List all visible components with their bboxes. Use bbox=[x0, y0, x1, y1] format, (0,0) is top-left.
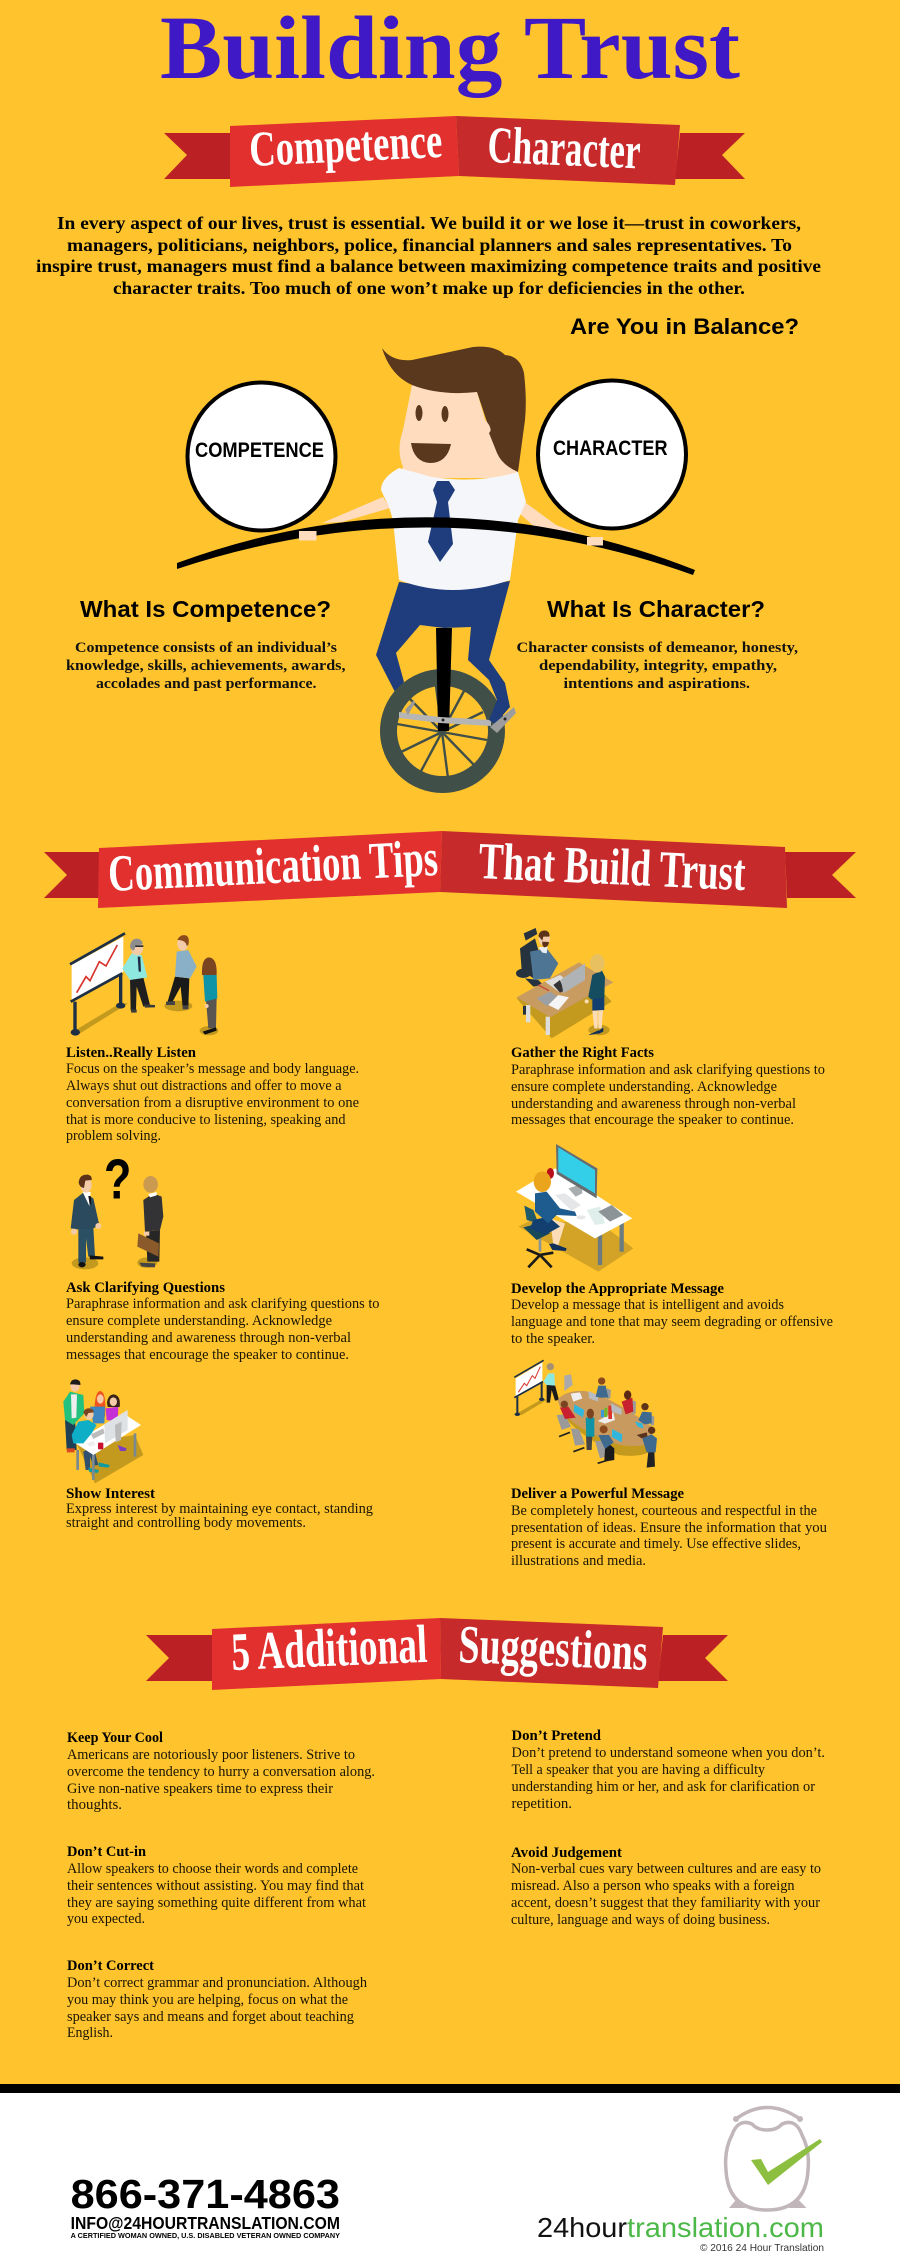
brand name: 24hourtranslation.com: 24hour bbox=[537, 2212, 627, 2243]
circle: character bbox=[538, 380, 686, 528]
circle: character: CHARACTER bbox=[553, 437, 668, 460]
intro paragraph: character traits. Too much of one won’t make up for deficiencies in the other. bbox=[113, 278, 745, 298]
heading: Are You in Balance?: Are You in Balance? bbox=[570, 314, 799, 339]
suggestion: don't pretend: Don’t Pretend bbox=[512, 1728, 601, 1744]
company tagline: A CERTIFIED WOMAN OWNED, U.S. DISABLED VETERAN OWNED COMPANY bbox=[71, 2231, 340, 2240]
tip: show interest: Show Interest bbox=[66, 1486, 155, 1502]
section: what is competence: accolades and past performance. bbox=[96, 676, 317, 692]
suggestion: avoid judgement: accent, doesn’t suggest that they familiarity with your bbox=[511, 1895, 820, 1911]
suggestion: don't correct: English. bbox=[67, 2025, 113, 2041]
tip: show interest: straight and controlling body movements. bbox=[66, 1515, 306, 1531]
tip: ask clarifying questions: ensure complete understanding. Acknowledge bbox=[66, 1313, 332, 1329]
tip: gather the right facts: ensure complete understanding. Acknowledge bbox=[511, 1079, 777, 1095]
section: what is competence: Competence consists of an individual’s bbox=[75, 640, 337, 656]
tip: listen really listen: conversation from a disruptive environment to one bbox=[66, 1095, 359, 1111]
suggestion: avoid judgement: Non-verbal cues vary between cultures and are easy to bbox=[511, 1861, 821, 1877]
suggestion: keep your cool: thoughts. bbox=[67, 1797, 122, 1813]
section: what is competence: knowledge, skills, achievements, awards, bbox=[66, 658, 346, 674]
suggestion: don't pretend: understanding him or her, and ask for clarification or bbox=[512, 1779, 815, 1795]
ribbon banner: Communication Tips That Build Trust bbox=[44, 830, 856, 908]
email address: INFO@24HOURTRANSLATION.COM bbox=[71, 2213, 340, 2233]
section: what is competence: What Is Competence? bbox=[80, 596, 331, 622]
brand name: 24hourtranslation.com: translation.com bbox=[627, 2212, 824, 2243]
section: what is character: intentions and aspirations. bbox=[564, 676, 750, 692]
suggestion: don't correct: you may think you are helping, focus on what the bbox=[67, 1992, 348, 2008]
intro paragraph bbox=[36, 213, 821, 298]
tip: deliver a powerful message: present is accurate and timely. Use effective slides, bbox=[511, 1536, 801, 1552]
tip: develop the appropriate message: Develop the Appropriate Message bbox=[511, 1281, 725, 1297]
circle: competence bbox=[188, 382, 336, 530]
icon: alarm clock logo with check mark bbox=[726, 2108, 822, 2210]
suggestion: don't pretend bbox=[512, 1728, 825, 1812]
circle: competence: COMPETENCE bbox=[195, 439, 324, 462]
tip: gather the right facts: understanding and awareness through non-verbal bbox=[511, 1096, 796, 1112]
suggestion: don't pretend: repetition. bbox=[512, 1796, 572, 1812]
footer panel bbox=[0, 2084, 900, 2256]
tip: listen really listen: problem solving. bbox=[66, 1128, 161, 1144]
suggestion: don't pretend: Tell a speaker that you are having a difficulty bbox=[512, 1762, 766, 1778]
tip: develop the appropriate message: Develop a message that is intelligent and avoids bbox=[511, 1297, 784, 1313]
ribbon banner: Communication Tips That Build Trust: That Build Trust bbox=[477, 833, 747, 902]
section: what is character bbox=[516, 596, 798, 692]
section: what is competence bbox=[66, 596, 346, 692]
tip: develop the appropriate message: language and tone that may seem degrading or offensive bbox=[511, 1314, 833, 1330]
tip: deliver a powerful message: illustrations and media. bbox=[511, 1553, 646, 1569]
ribbon banner: Competence Character: Competence bbox=[248, 112, 443, 177]
tip: ask clarifying questions: Paraphrase information and ask clarifying questions to bbox=[66, 1296, 380, 1312]
suggestion: keep your cool bbox=[67, 1730, 375, 1813]
tip: gather the right facts bbox=[511, 1045, 825, 1128]
ribbon banner: 5 Additional Suggestions bbox=[146, 1614, 728, 1690]
phone number: 866-371-4863 bbox=[71, 2171, 340, 2217]
ribbon banner: 5 Additional Suggestions: Suggestions bbox=[457, 1614, 649, 1682]
ribbon banner: 5 Additional Suggestions: 5 Additional bbox=[230, 1614, 428, 1682]
icon: two businessmen with question mark bbox=[71, 1148, 163, 1269]
suggestion: avoid judgement: Avoid Judgement bbox=[511, 1845, 622, 1861]
tip: listen really listen: that is more conducive to listening, speaking and bbox=[66, 1112, 346, 1128]
suggestion: keep your cool: overcome the tendency to hurry a conversation along. bbox=[67, 1764, 375, 1780]
suggestion: avoid judgement: misread. Also a person who speaks with a foreign bbox=[511, 1878, 795, 1894]
tip: gather the right facts: messages that encourage the speaker to continue. bbox=[511, 1112, 794, 1128]
intro paragraph: managers, politicians, neighbors, police, financial planners and sales representatives. To bbox=[67, 235, 792, 255]
suggestion: don't cut-in: their sentences without assisting. You may find that bbox=[67, 1878, 364, 1894]
suggestion: don't cut-in: you expected. bbox=[67, 1911, 145, 1927]
tip: listen really listen: Focus on the speaker’s message and body language. bbox=[66, 1061, 359, 1077]
icon: two businessmen with question mark: ? bbox=[104, 1148, 131, 1211]
intro paragraph: In every aspect of our lives, trust is essential. We build it or we lose it—trust in coworkers, bbox=[57, 213, 801, 233]
tip: listen really listen: Listen..Really Listen bbox=[66, 1045, 196, 1061]
ribbon banner: Communication Tips That Build Trust: Communication Tips bbox=[107, 830, 439, 903]
icon: woman working at computer desk bbox=[516, 1144, 633, 1272]
suggestion: don't pretend: Don’t pretend to understand someone when you don’t. bbox=[512, 1745, 825, 1761]
tip: show interest bbox=[66, 1486, 373, 1531]
suggestion: avoid judgement bbox=[511, 1845, 821, 1928]
icon: team of three at desk with monitor bbox=[63, 1379, 143, 1483]
section: what is character: Character consists of demeanor, honesty, bbox=[516, 640, 798, 656]
suggestion: keep your cool: Americans are notoriously poor listeners. Strive to bbox=[67, 1747, 355, 1763]
tip: ask clarifying questions bbox=[66, 1280, 380, 1363]
ribbon banner: Competence Character bbox=[164, 112, 745, 187]
icon: presenter at flip chart with two listeners bbox=[70, 933, 218, 1036]
icon: team meeting around a conference table bbox=[513, 1360, 657, 1468]
suggestion: don't correct bbox=[67, 1958, 368, 2041]
section: what is character: dependability, integrity, empathy, bbox=[539, 658, 777, 674]
suggestion: don't correct: Don’t Correct bbox=[67, 1958, 154, 1974]
tip: deliver a powerful message bbox=[511, 1486, 827, 1569]
tip: deliver a powerful message: Deliver a Powerful Message bbox=[511, 1486, 685, 1502]
tip: show interest: Express interest by maintaining eye contact, standing bbox=[66, 1501, 373, 1517]
tip: deliver a powerful message: Be completely honest, courteous and respectful in the bbox=[511, 1503, 817, 1519]
suggestion: don't correct: Don’t correct grammar and pronunciation. Although bbox=[67, 1975, 368, 1991]
suggestion: don't correct: speaker says and means and forget about teaching bbox=[67, 2009, 354, 2025]
title: Building Trust bbox=[160, 0, 740, 98]
suggestion: don't cut-in bbox=[67, 1844, 366, 1927]
tip: gather the right facts: Gather the Right Facts bbox=[511, 1045, 654, 1061]
brand name: 24hourtranslation.com bbox=[537, 2212, 824, 2243]
suggestion: avoid judgement: culture, language and ways of doing business. bbox=[511, 1912, 770, 1928]
ribbon banner: Competence Character: Character bbox=[486, 117, 642, 180]
suggestion: keep your cool: Keep Your Cool bbox=[67, 1730, 163, 1746]
tip: listen really listen: Always shut out distractions and offer to move a bbox=[66, 1078, 342, 1094]
intro paragraph: inspire trust, managers must find a balance between maximizing competence traits and positive bbox=[36, 256, 821, 276]
icon: man and woman at office desk with laptop bbox=[516, 928, 613, 1038]
tip: deliver a powerful message: presentation of ideas. Ensure the information that you bbox=[511, 1520, 827, 1536]
tip: ask clarifying questions: Ask Clarifying Questions bbox=[66, 1280, 225, 1296]
copyright: © 2016 24 Hour Translation bbox=[700, 2242, 824, 2254]
tip: ask clarifying questions: understanding and awareness through non-verbal bbox=[66, 1330, 351, 1346]
section: what is character: What Is Character? bbox=[547, 596, 765, 622]
tip: develop the appropriate message: to the speaker. bbox=[511, 1331, 595, 1347]
suggestion: don't cut-in: they are saying something quite different from what bbox=[67, 1895, 366, 1911]
tip: ask clarifying questions: messages that encourage the speaker to continue. bbox=[66, 1347, 349, 1363]
suggestion: don't cut-in: Allow speakers to choose their words and complete bbox=[67, 1861, 358, 1877]
tip: develop the appropriate message bbox=[511, 1281, 833, 1347]
suggestion: keep your cool: Give non-native speakers time to express their bbox=[67, 1781, 333, 1797]
tip: gather the right facts: Paraphrase information and ask clarifying questions to bbox=[511, 1062, 825, 1078]
tip: listen really listen bbox=[66, 1045, 359, 1144]
illustration: businessman balancing on a unicycle bbox=[177, 347, 695, 784]
suggestion: don't cut-in: Don’t Cut-in bbox=[67, 1844, 146, 1860]
icon: unicycle wheel bbox=[388, 678, 496, 784]
